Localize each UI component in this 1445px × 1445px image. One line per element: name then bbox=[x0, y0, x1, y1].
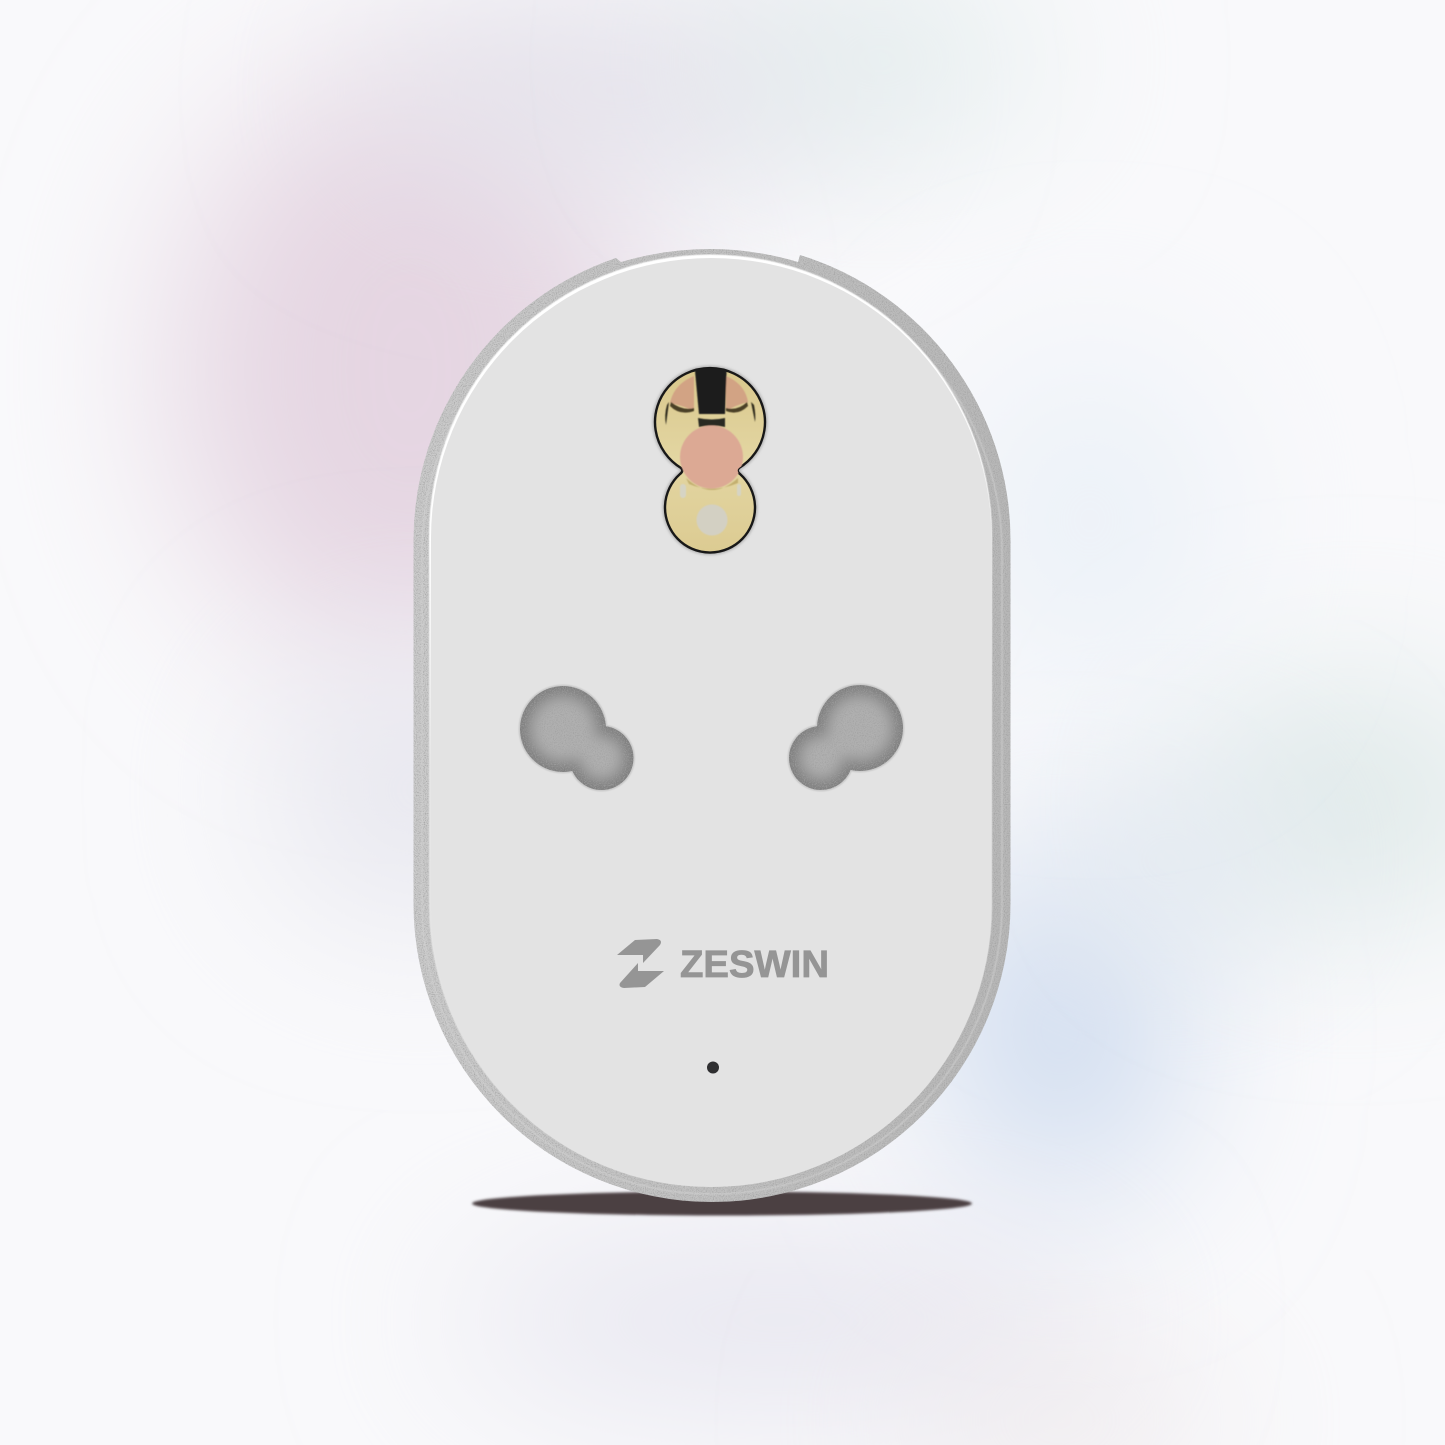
reflection: upper copper patches bbox=[670, 376, 694, 411]
earth pin socket: gold contact bbox=[655, 360, 765, 553]
icon: zeswin mark bbox=[617, 939, 664, 988]
left pin socket bbox=[518, 684, 635, 792]
reflection: large copper circle bbox=[680, 426, 743, 488]
reflection: small black bar bbox=[698, 418, 725, 427]
status LED bbox=[707, 1062, 719, 1074]
reflection: gold crescent bbox=[686, 478, 738, 490]
right pin socket bbox=[788, 684, 904, 792]
ground shadow bbox=[472, 1192, 972, 1216]
reflection: silver circle bbox=[696, 504, 728, 536]
reflection: black stripe bbox=[694, 369, 728, 415]
brand logo bbox=[617, 939, 829, 988]
plug outer rim with notches bbox=[414, 249, 1011, 1202]
smart plug bbox=[414, 249, 1011, 1202]
brand name: ZESWIN bbox=[680, 944, 829, 986]
reflection: silver tabs bbox=[680, 484, 686, 498]
rim groove line bbox=[422, 262, 1002, 1194]
plug front face bbox=[431, 258, 992, 1187]
reflection: side slivers bbox=[665, 402, 669, 425]
rim inner highlight bbox=[429, 254, 992, 1186]
